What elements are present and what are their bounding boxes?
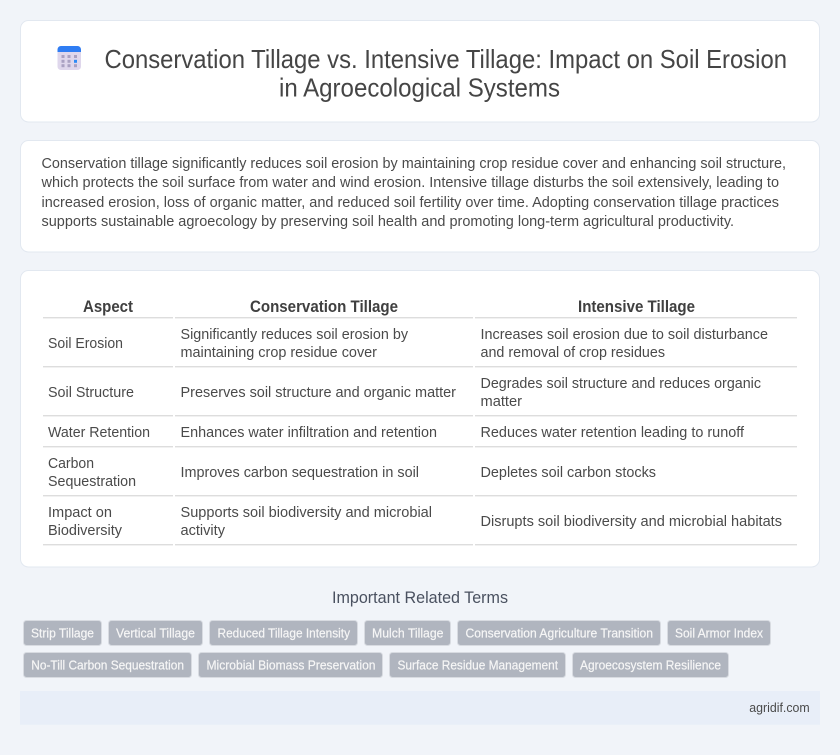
table row: soil erosion	[48, 327, 768, 361]
table row: soil erosion: Increases soil erosion due to soil disturbance	[480, 327, 768, 343]
table row: impact on biodiversity: activity	[180, 523, 226, 539]
table row: carbon sequestration: Depletes soil carbon stocks	[480, 465, 656, 481]
tag: Agroecosystem Resilience: Agroecosystem Resilience	[580, 658, 721, 672]
table row: water retention: Water Retention	[48, 425, 150, 441]
icon: calendar	[58, 46, 81, 70]
table row: soil erosion: and removal of crop residues	[480, 345, 665, 361]
tag: Vertical Tillage	[108, 620, 202, 646]
tag: Microbial Biomass Preservation: Microbial Biomass Preservation	[206, 658, 376, 672]
table row: impact on biodiversity: Biodiversity	[48, 523, 123, 539]
table row: carbon sequestration	[48, 456, 656, 490]
text block: introduction paragraph: supports sustainable agroecology by preserving soil health and promoting long-term agricultural productivity.	[42, 214, 734, 230]
title	[104, 44, 787, 102]
tag: Conservation Agriculture Transition	[458, 620, 660, 646]
table row: impact on biodiversity	[48, 505, 782, 539]
table row: carbon sequestration: Improves carbon sequestration in soil	[180, 465, 419, 481]
tag: Agroecosystem Resilience	[572, 652, 728, 678]
tag: Strip Tillage: Strip Tillage	[31, 626, 94, 640]
tag: Conservation Agriculture Transition: Conservation Agriculture Transition	[466, 626, 653, 640]
table row: soil erosion: maintaining crop residue cover	[180, 345, 377, 361]
table header row: Conservation Tillage	[250, 298, 398, 316]
heading: important related terms: Important Related Terms	[332, 589, 508, 607]
table row: impact on biodiversity: Supports soil biodiversity and microbial	[180, 505, 432, 521]
table row: impact on biodiversity: Impact on	[48, 505, 112, 521]
title: in Agroecological Systems	[279, 72, 560, 102]
table row: soil structure: Preserves soil structure and organic matter	[180, 385, 456, 401]
panel: comparison table	[20, 270, 820, 567]
table row: water retention: Reduces water retention leading to runoff	[480, 425, 745, 441]
footer	[20, 691, 820, 725]
table row: carbon sequestration: Sequestration	[48, 474, 136, 490]
table row: water retention	[48, 425, 745, 441]
title: Conservation Tillage vs. Intensive Tillage: Impact on Soil Erosion	[104, 44, 787, 74]
table row: soil structure: Degrades soil structure and reduces organic	[480, 376, 761, 392]
tag: No-Till Carbon Sequestration: No-Till Carbon Sequestration	[31, 658, 184, 672]
tag: Vertical Tillage: Vertical Tillage	[116, 626, 195, 640]
table row: carbon sequestration: Carbon	[48, 456, 94, 472]
panel: related term tags	[24, 620, 770, 678]
tag: Microbial Biomass Preservation	[198, 652, 382, 678]
tag: Surface Residue Management: Surface Residue Management	[398, 658, 558, 672]
tag: Reduced Tillage Intensity	[210, 620, 358, 646]
tag: Soil Armor Index	[668, 620, 770, 646]
text block: introduction paragraph: increased erosion, loss of organic matter, and reduced soil fertility over time. Adopting conservation tillage practices	[42, 195, 779, 211]
footer: agridif.com	[749, 700, 810, 715]
table row: soil erosion: Soil Erosion	[48, 336, 123, 352]
table row: soil structure	[48, 376, 761, 410]
text block: introduction paragraph: which protects the soil surface from water and wind erosion. Intensive tillage disturbs the soil extensively, leading to	[41, 175, 779, 191]
table row: impact on biodiversity: Disrupts soil biodiversity and microbial habitats	[480, 514, 782, 530]
table row: water retention: Enhances water infiltration and retention	[180, 425, 437, 441]
tag: Surface Residue Management	[390, 652, 566, 678]
tag: Mulch Tillage: Mulch Tillage	[372, 626, 444, 640]
table row: soil structure: Soil Structure	[48, 385, 134, 401]
tag: Reduced Tillage Intensity: Reduced Tillage Intensity	[218, 626, 351, 640]
table header row	[83, 298, 695, 316]
tag: Soil Armor Index: Soil Armor Index	[675, 626, 764, 640]
panel: introduction	[20, 140, 820, 252]
table header row: Intensive Tillage	[578, 298, 695, 316]
panel: title header	[20, 20, 820, 122]
tag: No-Till Carbon Sequestration	[24, 652, 192, 678]
tag: Mulch Tillage	[364, 620, 450, 646]
tag: Strip Tillage	[24, 620, 102, 646]
table row: soil structure: matter	[480, 394, 522, 410]
table header row: Aspect	[83, 298, 133, 316]
table row: soil erosion: Significantly reduces soil erosion by	[180, 327, 409, 343]
text block: introduction paragraph	[41, 156, 786, 230]
text block: introduction paragraph: Conservation tillage significantly reduces soil erosion by maintaining crop residue cover and enhancing soil structure,	[42, 156, 786, 172]
